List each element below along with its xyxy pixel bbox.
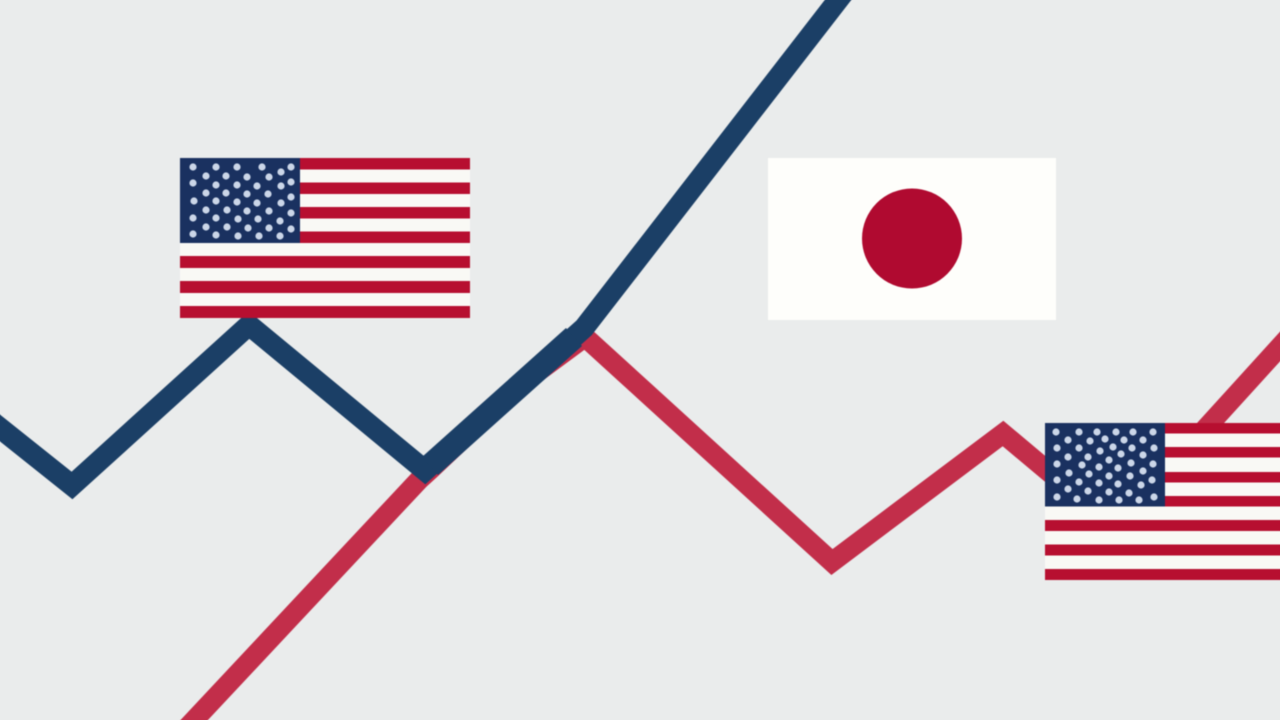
navy line chart series (0, 0, 846, 485)
red line chart series (183, 329, 1280, 720)
flag: United States (right, cropped by page edge) (1045, 423, 1280, 580)
flag: United States (left) (180, 158, 470, 318)
flag: Japan (768, 158, 1056, 320)
